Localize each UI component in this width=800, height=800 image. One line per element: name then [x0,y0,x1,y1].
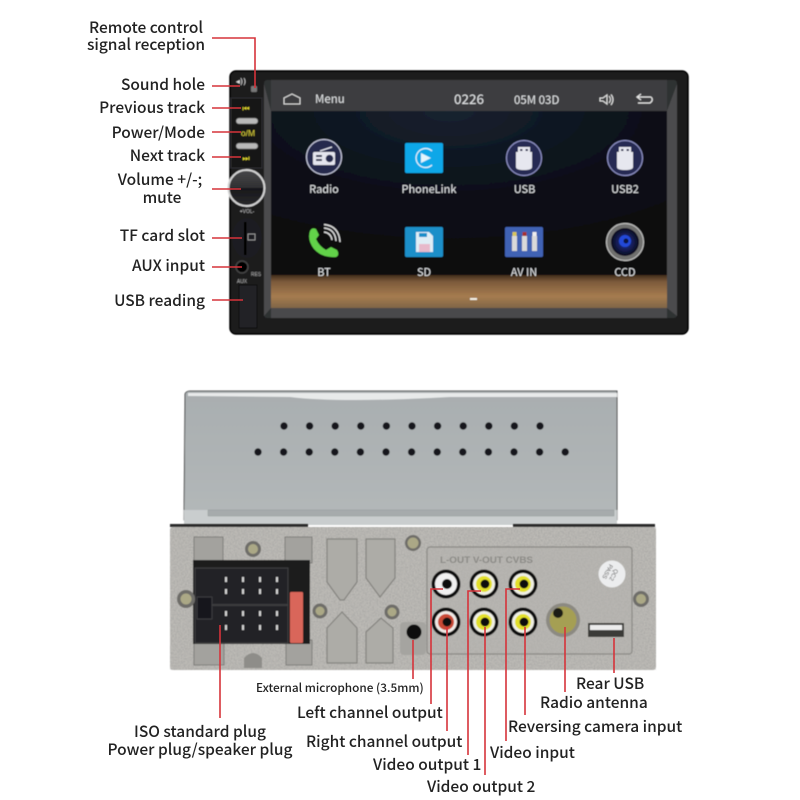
top highlight [188,393,617,400]
screen bezel side shading [264,84,677,316]
recessed port panel [427,547,632,654]
icon: speaker volume [600,94,613,105]
white left audio rca [432,570,460,598]
front labels [87,16,205,311]
power mode glyph: o/M [241,128,255,138]
screws [177,535,649,620]
phonelink label: PhoneLink [402,181,456,197]
radio antenna socket [546,603,580,637]
page indicator [470,298,477,300]
icon: back arrow [637,94,652,103]
iso connector [193,560,310,644]
connector latch [197,597,212,619]
connector body [193,560,310,644]
screen status bar [271,80,667,111]
vol label: +VOL- [240,209,255,215]
screen bottom strip [271,308,667,318]
label: video input: Video input [489,741,575,763]
label: tf card slot: TF card slot [120,224,205,246]
bt label: BT [317,264,331,280]
menu label: Menu [315,91,345,107]
control strip [228,77,264,328]
connector divider [212,604,288,606]
icon: usb2 [608,140,642,176]
panel: front of head unit [228,71,688,334]
aux jack [236,261,248,273]
qc pass sticker: PASS [600,563,613,579]
rear labels [108,672,682,797]
clock: 0226 [454,88,484,108]
label: radio antenna: Radio antenna [540,691,648,713]
usb reading slot [239,285,257,328]
metal plate [170,527,656,670]
panel: rear chassis top [184,391,617,525]
lower button pill [236,143,258,149]
res label: RES [251,272,262,278]
metal grain [170,527,656,670]
radio label: Radio [309,181,339,197]
tf card slot [232,218,262,258]
icon: home [284,94,300,104]
panel: rear connector plate [170,524,656,670]
label: usb reading: USB reading [114,289,205,311]
icon: phonelink [405,143,443,173]
metal top case [184,391,617,520]
dark seam right [513,524,655,527]
previous track glyph: ⏮ [242,104,250,113]
label: iso standard plug: ISO standard plug [134,720,266,742]
label: remote control: Remote control [89,16,203,38]
label: sound hole: Sound hole [121,73,205,95]
label: rear usb: Rear USB [576,672,644,694]
ventilation holes [254,422,569,456]
icon: av in [505,227,543,257]
icon: radio [306,140,342,174]
front callout lines [212,38,255,300]
vent pentagons [327,539,395,663]
case lip [184,510,617,525]
icon: sd card [405,227,443,257]
wood shelf wallpaper [271,275,667,308]
case fold [208,510,614,516]
qc pass sticker [598,560,626,588]
dark seam left [170,524,308,527]
button block [231,98,262,168]
rear callout lines [220,589,614,775]
label: video output 2: Video output 2 [426,775,536,797]
label: previous track: Previous track [99,96,205,118]
connector inner frame [195,568,288,643]
aux label: AUX [237,279,248,285]
label: video output 1: Video output 1 [372,753,481,775]
yellow reversing camera rca [508,608,538,636]
usb2 label: USB2 [611,181,639,197]
red right audio rca [432,608,460,636]
device frame [230,71,688,334]
av in label: AV IN [511,264,537,280]
volume knob [228,170,264,206]
label: mute: mute [143,186,182,208]
label: next track: Next track [130,144,205,166]
upper button pill [236,118,258,124]
plate cutout tabs [194,537,312,665]
rear usb port [588,623,624,637]
icon: sound hole: ◂)) [236,77,246,86]
label: external microphone: External microphone (3.5mm) [256,679,424,696]
microphone jack [400,622,426,655]
yellow video output 2 rca [470,608,498,636]
yellow video output 1 rca [470,570,498,598]
yellow video input rca [508,570,538,598]
screen bezel [264,80,677,318]
ccd label: CCD [614,264,636,280]
usb label: USB [514,181,535,197]
icon: usb [506,140,542,176]
label: aux input: AUX input [132,254,205,276]
icon: bluetooth phone [309,224,340,257]
label: right channel output: Right channel output [306,730,462,752]
next track glyph: ⏭ [242,154,250,163]
label: left channel output: Left channel output [297,701,443,723]
screen wallpaper [271,111,667,275]
connector pins [225,577,278,630]
label: signal reception: signal reception [87,33,205,55]
icon: remote sensor [251,86,257,92]
label: volume: Volume +/-; [117,168,202,190]
sd label: SD [417,264,431,280]
date: 05M 03D [514,92,559,108]
port legend: L-OUT V-OUT CVBS [440,555,533,565]
label: power mode: Power/Mode [112,121,205,143]
label: reversing camera input: Reversing camera input [508,715,682,737]
label: power plug speaker plug: Power plug/speaker plug [108,738,292,760]
qc pass sticker: QC2 [607,568,618,582]
fuse [290,592,303,643]
bottom notch [244,653,262,668]
icon: ccd camera lens [606,224,644,260]
